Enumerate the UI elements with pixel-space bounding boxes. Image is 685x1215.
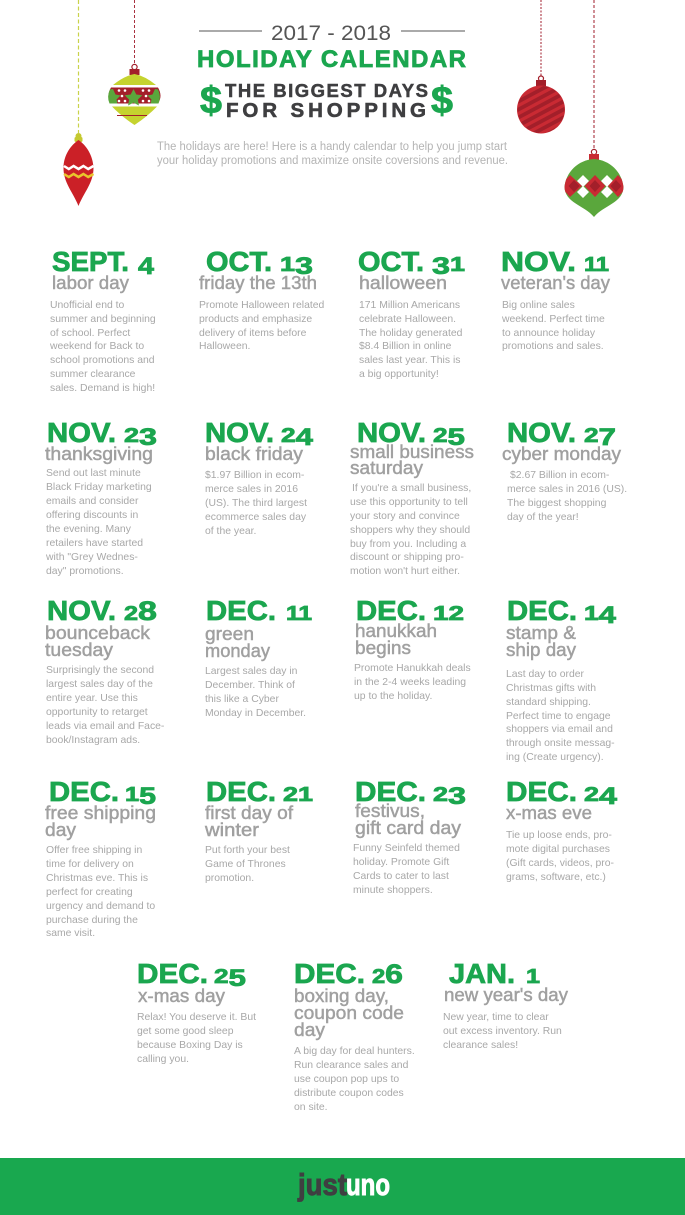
panel: dec 24: grams, software, etc.) bbox=[506, 872, 606, 883]
panel: dec 21: winter bbox=[204, 820, 259, 840]
panel: nov 11: promotions and sales. bbox=[502, 341, 604, 352]
panel: nov 25: small business bbox=[350, 442, 474, 462]
panel: nov 27 bbox=[502, 417, 627, 523]
panel: dec 23: holiday. Promote Gift bbox=[353, 857, 449, 868]
panel: nov 28: leads via email and Face- bbox=[46, 721, 164, 732]
panel: oct 31: halloween bbox=[359, 273, 447, 293]
intro text: your holiday promotions and maximize onsite coversions and revenue. bbox=[157, 155, 508, 167]
logo: justuno: just bbox=[297, 1167, 347, 1202]
panel: nov 28: entire year. Use this bbox=[46, 693, 138, 704]
title: holiday calendar: HOLIDAY CALENDAR bbox=[197, 46, 466, 73]
panel: nov 24: 4 bbox=[296, 424, 314, 451]
panel: nov 23: NOV. bbox=[47, 417, 116, 448]
panel: oct 31 bbox=[358, 246, 465, 380]
intro text bbox=[157, 141, 508, 167]
ornament: yellow ornament with red band bbox=[108, 0, 160, 125]
panel: dec 14: Last day to order bbox=[506, 669, 585, 680]
ornament: red teardrop with zigzag bbox=[64, 0, 94, 206]
panel: oct 31: 171 Million Americans bbox=[359, 300, 460, 311]
panel: dec 21: Put forth your best bbox=[205, 845, 290, 856]
panel: nov 23: thanksgiving bbox=[45, 444, 153, 464]
panel: nov 23: 2 bbox=[124, 425, 139, 447]
panel: dec 14: stamp & bbox=[506, 623, 576, 643]
panel: nov 23: Black Friday marketing bbox=[46, 482, 152, 493]
panel: dec 14: ing (Create urgency). bbox=[506, 752, 604, 763]
panel: dec 26: use coupon pop ups to bbox=[294, 1074, 399, 1085]
panel: dec 23: Cards to cater to last bbox=[353, 871, 449, 882]
panel: dec 14: Perfect time to engage bbox=[506, 711, 611, 722]
panel: dec 25: x-mas day bbox=[138, 986, 225, 1006]
panel: dec 23 bbox=[353, 776, 466, 896]
panel: oct 31: a big opportunity! bbox=[359, 369, 439, 380]
panel: dec 26: 26 bbox=[372, 959, 403, 989]
subtitle: the biggest days for shopping bbox=[200, 80, 453, 122]
panel: nov 27: $2.67 Billion in ecom- bbox=[510, 470, 609, 481]
panel: sept 4: weekend for Back to bbox=[49, 341, 144, 352]
panel: sept 4: SEPT. bbox=[52, 246, 129, 277]
panel: nov 23: day" promotions. bbox=[46, 566, 124, 577]
panel: nov 25: buy from you. Including a bbox=[350, 539, 466, 550]
title: years: 2017 - 2018 bbox=[271, 22, 391, 45]
panel: nov 28: tuesday bbox=[45, 640, 113, 660]
panel: dec 11: 11 bbox=[286, 603, 312, 625]
panel: dec 26: day bbox=[294, 1020, 325, 1040]
panel: nov 25: 5 bbox=[448, 424, 465, 451]
panel: dec 24: Tie up loose ends, pro- bbox=[506, 830, 612, 841]
panel: sept 4: sales. Demand is high! bbox=[50, 383, 155, 394]
panel: nov 28: Surprisingly the second bbox=[46, 665, 154, 676]
panel: nov 25: 2 bbox=[433, 425, 448, 447]
panel: nov 25 bbox=[350, 417, 474, 577]
panel: dec 15: same visit. bbox=[46, 928, 95, 939]
panel: nov 28: 28 bbox=[124, 596, 157, 626]
panel: dec 26: DEC. bbox=[294, 958, 365, 989]
panel: sept 4: summer and beginning bbox=[50, 314, 156, 325]
panel: nov 24 bbox=[205, 417, 314, 537]
panel: nov 11: NOV. bbox=[501, 246, 576, 277]
panel: nov 25: motion won't hurt either. bbox=[350, 566, 460, 577]
panel: jan 1 bbox=[443, 958, 568, 1051]
panel: dec 15: time for delivery on bbox=[46, 859, 134, 870]
panel: oct 13: friday the 13th bbox=[199, 273, 317, 293]
panel: oct 31: OCT. bbox=[358, 246, 424, 277]
panel: nov 24: $1.97 Billion in ecom- bbox=[205, 470, 304, 481]
panel: sept 4: 4 bbox=[138, 253, 155, 280]
panel: dec 12 bbox=[354, 595, 471, 702]
panel: dec 15 bbox=[45, 776, 156, 939]
panel: nov 28: opportunity to retarget bbox=[46, 707, 148, 718]
panel: nov 25: saturday bbox=[350, 458, 423, 478]
subtitle: the biggest days for shopping: $ bbox=[431, 80, 453, 122]
panel: oct 13: products and emphasize bbox=[199, 314, 312, 325]
panel: nov 28: book/Instagram ads. bbox=[46, 735, 140, 746]
panel: dec 14: ship day bbox=[506, 640, 576, 660]
panel: oct 13: Halloween. bbox=[199, 341, 250, 352]
panel: dec 15: perfect for creating bbox=[46, 887, 133, 898]
panel: dec 26: on site. bbox=[294, 1102, 328, 1113]
intro text: The holidays are here! Here is a handy calendar to help you jump start bbox=[157, 141, 508, 153]
panel: nov 23: retailers have started bbox=[46, 538, 143, 549]
panel: nov 24: NOV. bbox=[205, 417, 274, 448]
panel: sept 4: labor day bbox=[52, 273, 129, 293]
panel: dec 12: hanukkah bbox=[355, 621, 437, 641]
panel: dec 24: 2 bbox=[584, 784, 599, 806]
ornament: red striped ball bbox=[517, 0, 565, 134]
panel: nov 11 bbox=[501, 246, 610, 352]
panel: dec 14 bbox=[506, 595, 617, 763]
panel: dec 12: begins bbox=[355, 638, 411, 658]
panel: nov 11: to announce holiday bbox=[502, 328, 596, 339]
panel: dec 11: Largest sales day in bbox=[205, 666, 298, 677]
panel: dec 11: monday bbox=[205, 641, 270, 661]
panel: dec 25: 2 bbox=[214, 966, 229, 988]
panel: nov 11: Big online sales bbox=[502, 300, 575, 311]
panel: dec 23: Funny Seinfeld themed bbox=[353, 843, 460, 854]
panel: dec 14: DEC. bbox=[507, 595, 577, 626]
panel: oct 13: delivery of items before bbox=[199, 328, 307, 339]
panel: dec 25 bbox=[137, 958, 256, 1065]
panel: dec 26: boxing day, bbox=[294, 986, 389, 1006]
panel: dec 14: 1 bbox=[584, 603, 599, 625]
panel: dec 25: calling you. bbox=[137, 1054, 189, 1065]
panel: dec 12: Promote Hanukkah deals bbox=[354, 663, 471, 674]
panel: dec 21 bbox=[204, 776, 313, 884]
panel: dec 14: Christmas gifts with bbox=[506, 683, 596, 694]
panel: nov 27: The biggest shopping bbox=[507, 498, 607, 509]
panel: dec 11 bbox=[205, 595, 312, 719]
panel: oct 13: 3 bbox=[295, 253, 313, 280]
panel: nov 24: black friday bbox=[205, 444, 303, 464]
panel: oct 13 bbox=[199, 246, 325, 352]
panel: nov 11: weekend. Perfect time bbox=[501, 314, 605, 325]
panel: dec 26: coupon code bbox=[294, 1003, 404, 1023]
panel: nov 23: Send out last minute bbox=[46, 468, 141, 479]
panel: dec 24: 4 bbox=[599, 783, 618, 810]
logo: justuno: uno bbox=[346, 1167, 390, 1202]
panel: nov 25: your story and convince bbox=[350, 511, 460, 522]
panel: nov 25: discount or shipping pro- bbox=[350, 552, 464, 563]
panel: dec 11: this like a Cyber bbox=[205, 694, 279, 705]
panel: nov 28: largest sales day of the bbox=[46, 679, 153, 690]
panel: nov 27: 2 bbox=[584, 425, 599, 447]
panel: dec 25: get some good sleep bbox=[137, 1026, 234, 1037]
panel: dec 26: A big day for deal hunters. bbox=[294, 1046, 415, 1057]
panel: jan 1: JAN. bbox=[449, 958, 515, 989]
panel: oct 13: 1 bbox=[280, 254, 295, 276]
footer bar with logo bbox=[0, 1158, 685, 1215]
panel: dec 25: 5 bbox=[229, 965, 246, 992]
panel: dec 23: 3 bbox=[448, 783, 466, 810]
panel: nov 11: veteran's day bbox=[501, 273, 610, 293]
panel: nov 25: If you're a small business, bbox=[352, 483, 471, 494]
panel: dec 12: 12 bbox=[433, 603, 464, 625]
panel: dec 14: 4 bbox=[599, 602, 617, 629]
panel: dec 26: Run clearance sales and bbox=[294, 1060, 409, 1071]
panel: dec 21: Game of Thrones bbox=[205, 859, 286, 870]
panel: sept 4: summer clearance bbox=[50, 369, 136, 380]
panel: oct 31: celebrate Halloween. bbox=[359, 314, 456, 325]
panel: jan 1: new year's day bbox=[444, 985, 568, 1005]
panel: nov 23: offering discounts in bbox=[46, 510, 138, 521]
panel: dec 12: up to the holiday. bbox=[354, 691, 432, 702]
panel: dec 11: DEC. bbox=[206, 595, 276, 626]
panel: jan 1: out excess inventory. Run bbox=[443, 1026, 562, 1037]
panel: dec 11: green bbox=[205, 624, 254, 644]
panel: oct 13: Promote Halloween related bbox=[199, 300, 325, 311]
panel: dec 14: through onsite messag- bbox=[506, 738, 615, 749]
panel: dec 15: urgency and demand to bbox=[46, 901, 155, 912]
panel: oct 31: 3 bbox=[432, 253, 450, 280]
panel: nov 27: 7 bbox=[599, 424, 616, 451]
panel: nov 24: of the year. bbox=[205, 526, 256, 537]
panel: dec 25: DEC. bbox=[137, 958, 208, 989]
panel: nov 23: 3 bbox=[139, 424, 157, 451]
panel: nov 24: (US). The third largest bbox=[205, 498, 307, 509]
panel: nov 11: 11 bbox=[584, 254, 609, 276]
panel: nov 25: NOV. bbox=[357, 417, 426, 448]
panel: dec 23: festivus, bbox=[355, 801, 425, 821]
panel: nov 28: NOV. bbox=[47, 595, 116, 626]
panel: nov 27: NOV. bbox=[507, 417, 576, 448]
panel: dec 26 bbox=[294, 958, 415, 1113]
panel: jan 1: clearance sales! bbox=[443, 1040, 518, 1051]
panel: dec 21: DEC. bbox=[206, 776, 276, 807]
panel: nov 25: shoppers why they should bbox=[350, 525, 470, 536]
panel: sept 4 bbox=[49, 246, 156, 394]
panel: dec 24: (Gift cards, videos, pro- bbox=[506, 858, 614, 869]
panel: dec 23: gift card day bbox=[355, 818, 461, 838]
panel: dec 14: shoppers via email and bbox=[506, 724, 613, 735]
panel: nov 28 bbox=[45, 595, 164, 746]
panel: nov 25: use this opportunity to tell bbox=[350, 497, 468, 508]
panel: jan 1: 1 bbox=[526, 966, 540, 988]
subtitle: the biggest days for shopping: FOR SHOPPING bbox=[226, 99, 426, 122]
panel: nov 27: cyber monday bbox=[502, 444, 621, 464]
panel: sept 4: Unofficial end to bbox=[50, 300, 125, 311]
panel: dec 15: Christmas eve. This is bbox=[46, 873, 148, 884]
panel: oct 31: 1 bbox=[450, 254, 465, 276]
subtitle: the biggest days for shopping: THE BIGGEST DAYS bbox=[225, 80, 428, 101]
panel: dec 24: DEC. bbox=[506, 776, 577, 807]
panel: nov 23 bbox=[45, 417, 157, 577]
panel: dec 15: free shipping bbox=[45, 803, 156, 823]
panel: oct 13: OCT. bbox=[206, 246, 272, 277]
panel: nov 23: emails and consider bbox=[46, 496, 139, 507]
panel: dec 14: standard shipping. bbox=[506, 697, 591, 708]
panel: dec 25: because Boxing Day is bbox=[137, 1040, 243, 1051]
panel: nov 24: 2 bbox=[281, 425, 296, 447]
panel: nov 23: the evening. Many bbox=[46, 524, 132, 535]
panel: dec 12: DEC. bbox=[356, 595, 426, 626]
panel: dec 24 bbox=[506, 776, 618, 883]
subtitle: the biggest days for shopping: $ bbox=[200, 80, 222, 122]
panel: dec 21: promotion. bbox=[205, 873, 254, 884]
panel: dec 15: purchase during the bbox=[46, 915, 138, 926]
panel: nov 23: with "Grey Wednes- bbox=[45, 552, 138, 563]
panel: dec 21: 21 bbox=[283, 784, 313, 806]
panel: dec 23: DEC. bbox=[355, 776, 426, 807]
panel: dec 15: DEC. bbox=[49, 776, 119, 807]
panel: nov 27: day of the year! bbox=[507, 512, 579, 523]
panel: oct 31: The holiday generated bbox=[359, 328, 463, 339]
panel: dec 12: in the 2-4 weeks leading bbox=[354, 677, 466, 688]
panel: dec 15: day bbox=[45, 820, 76, 840]
panel: oct 31: $8.4 Billion in online bbox=[359, 341, 452, 352]
panel: dec 15: 5 bbox=[139, 783, 156, 810]
panel: dec 15: 1 bbox=[125, 784, 139, 806]
panel: dec 23: minute shoppers. bbox=[353, 885, 433, 896]
panel: nov 24: merce sales in 2016 bbox=[205, 484, 298, 495]
panel: dec 11: Monday in December. bbox=[205, 708, 306, 719]
panel: dec 24: mote digital purchases bbox=[506, 844, 610, 855]
panel: sept 4: school promotions and bbox=[50, 355, 155, 366]
panel: oct 31: sales last year. This is bbox=[359, 355, 460, 366]
panel: dec 23: 2 bbox=[433, 784, 448, 806]
logo: justuno bbox=[297, 1167, 390, 1202]
panel: sept 4: of school. Perfect bbox=[50, 328, 130, 339]
ornament: green argyle bbox=[564, 0, 624, 217]
panel: dec 11: December. Think of bbox=[205, 680, 295, 691]
panel: nov 24: ecommerce sales day bbox=[205, 512, 307, 523]
panel: dec 25: Relax! You deserve it. But bbox=[137, 1012, 256, 1023]
panel: nov 28: bounceback bbox=[45, 623, 151, 643]
panel: nov 27: merce sales in 2016 (US). bbox=[507, 484, 627, 495]
panel: dec 24: x-mas eve bbox=[506, 803, 592, 823]
panel: dec 21: first day of bbox=[205, 803, 294, 823]
panel: dec 15: Offer free shipping in bbox=[46, 845, 142, 856]
panel: jan 1: New year, time to clear bbox=[443, 1012, 549, 1023]
panel: dec 26: distribute coupon codes bbox=[294, 1088, 404, 1099]
